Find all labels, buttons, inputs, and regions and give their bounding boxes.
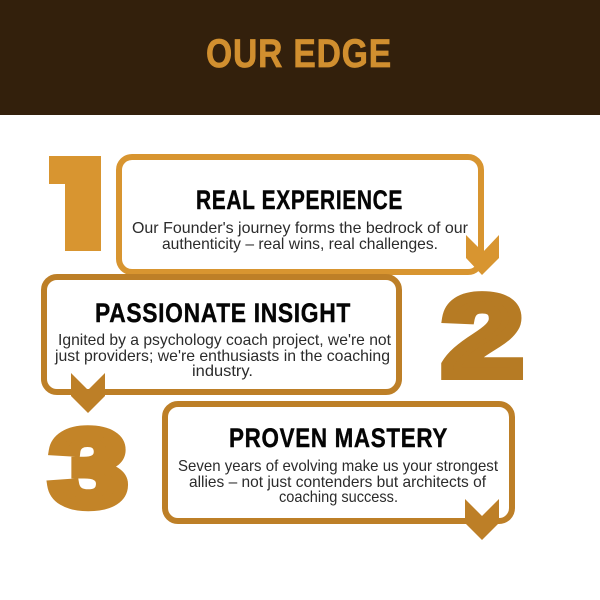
- arrow: passionate insight: [71, 373, 105, 413]
- arrow: real experience: [466, 235, 499, 275]
- text: proven mastery body: allies – not just contenders but architects of: [189, 474, 487, 491]
- title: OUR EDGE: [206, 32, 392, 76]
- panel: proven mastery: [165, 404, 512, 540]
- text: proven mastery body: [178, 458, 499, 506]
- text: proven mastery body: Seven years of evolving make us your strongest: [178, 458, 499, 475]
- text: passionate insight body: Ignited by a psychology coach project, we're not: [58, 332, 392, 349]
- text: real experience body: [132, 220, 469, 253]
- text: passionate insight body: industry.: [192, 363, 253, 380]
- text: real experience body: authenticity – real wins, real challenges.: [162, 236, 438, 253]
- numeral 1: 1: [27, 127, 123, 281]
- text: passionate insight body: just providers; we're enthusiasts in the coaching: [54, 348, 390, 365]
- heading: real experience: REAL EXPERIENCE: [196, 185, 403, 215]
- heading: passionate insight: PASSIONATE INSIGHT: [95, 298, 351, 328]
- panel: passionate insight: [44, 277, 399, 413]
- arrow: proven mastery: [465, 499, 499, 540]
- numeral 2: 2: [443, 274, 522, 399]
- text: passionate insight body: [54, 332, 392, 380]
- heading: proven mastery: PROVEN MASTERY: [229, 423, 448, 453]
- text: proven mastery body: coaching success.: [279, 489, 398, 506]
- numeral 3: 3: [50, 409, 127, 529]
- text: real experience body: Our Founder's journey forms the bedrock of our: [132, 220, 469, 237]
- header band: [0, 0, 600, 115]
- panel: real experience: [119, 157, 499, 275]
